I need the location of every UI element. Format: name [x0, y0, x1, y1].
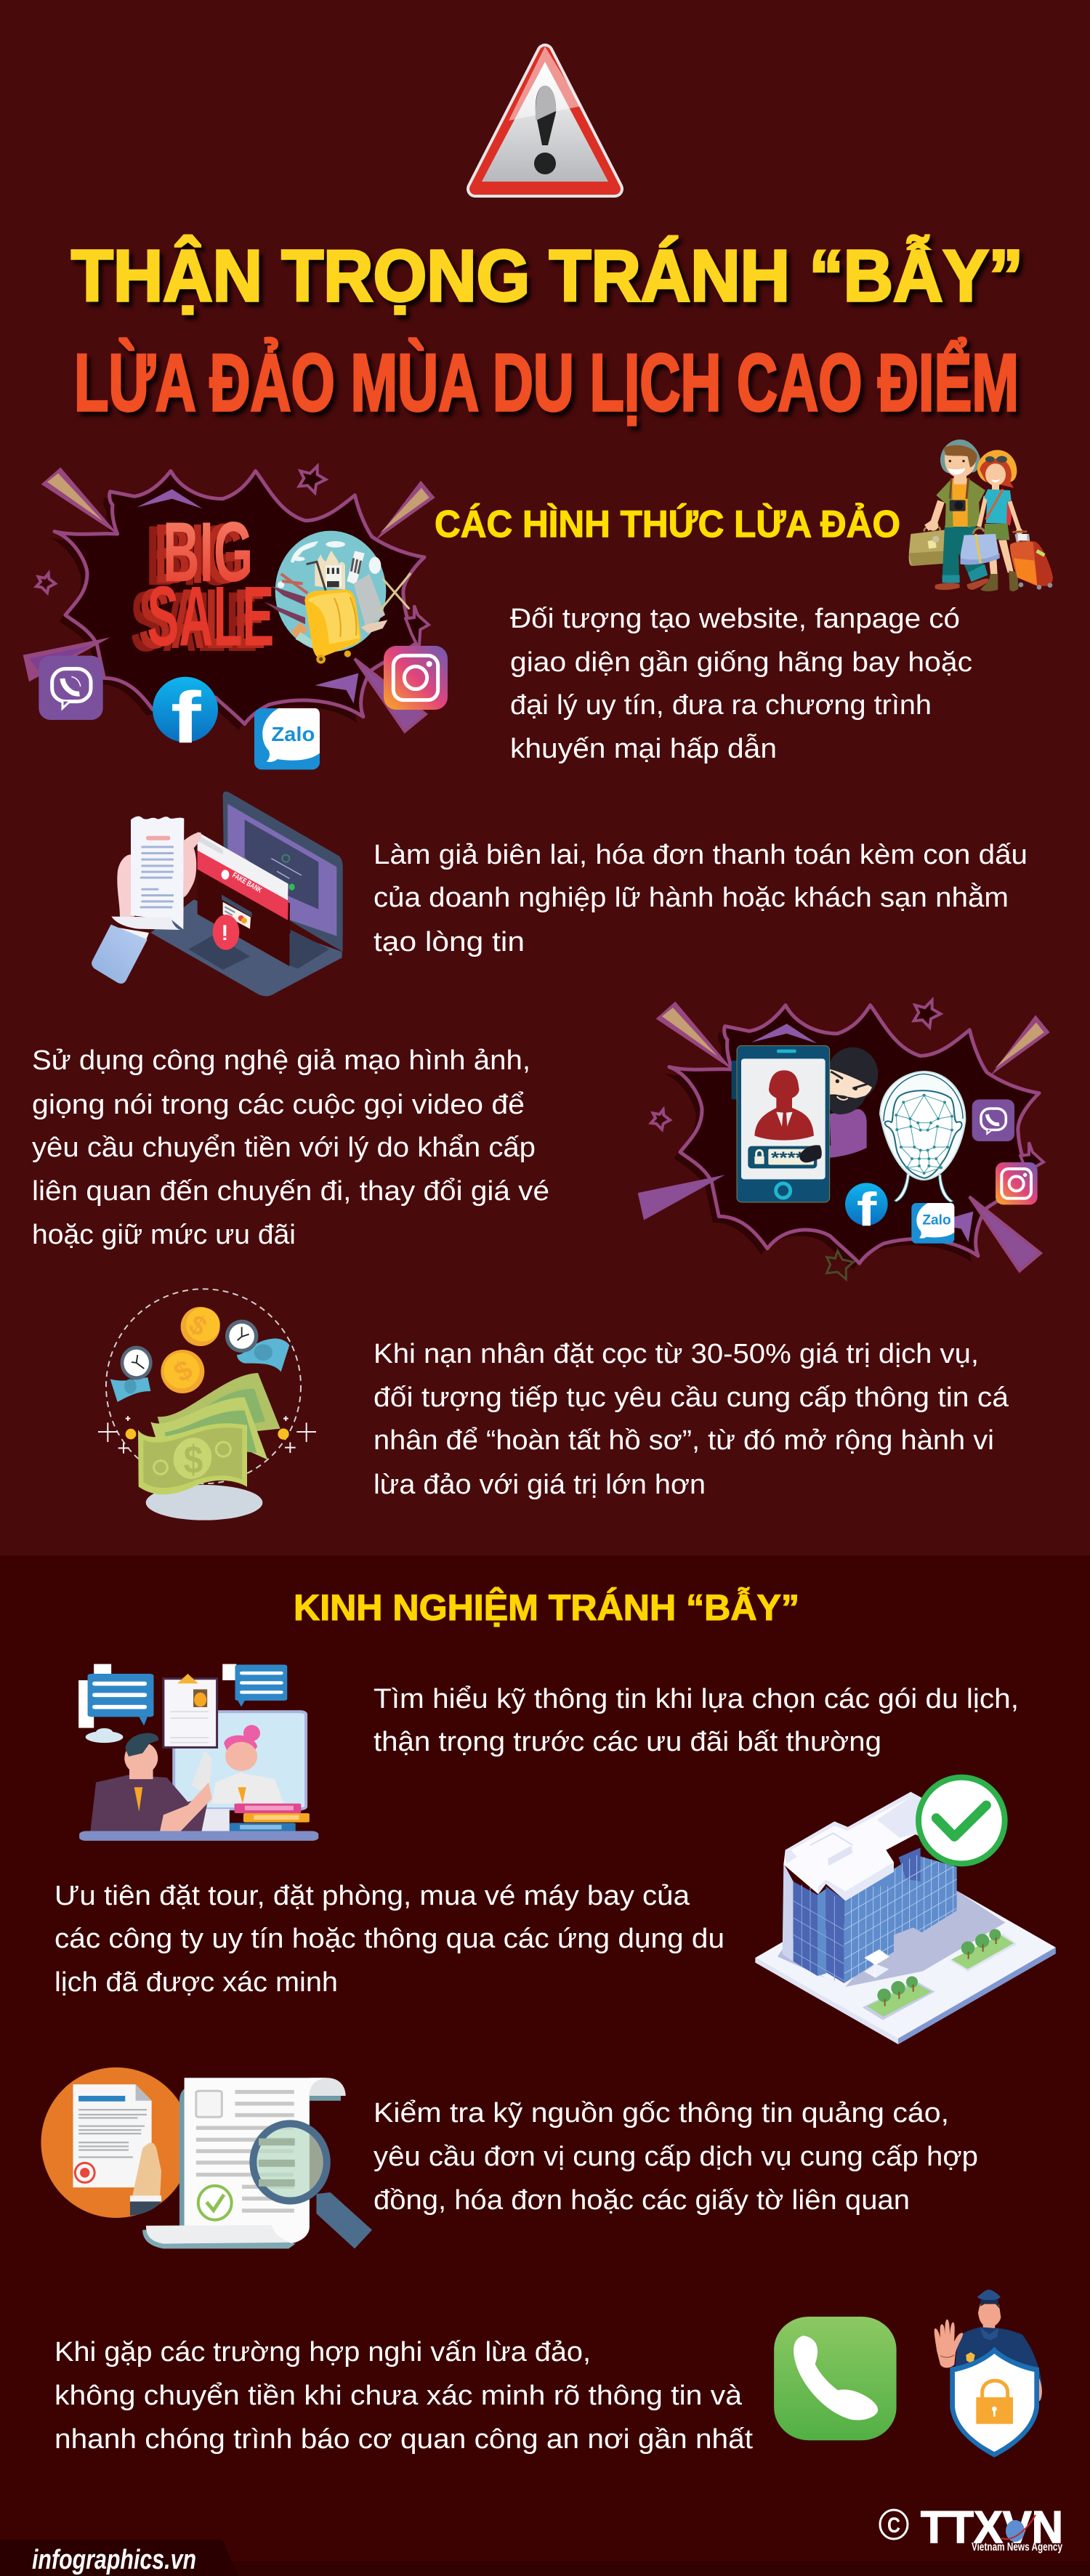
illustration: thief [820, 1048, 878, 1159]
text: big sale: SALE [139, 571, 266, 666]
icon: facebook small [845, 1183, 888, 1236]
illustration: deepfake content [732, 1045, 1038, 1244]
text block: deposit: Khi nạn nhân đặt cọc từ 30-50% giá trị dịch vụ, [374, 1339, 979, 1369]
icon: warning triangle [475, 46, 615, 189]
illustration: fake receipt and laptop [92, 792, 343, 996]
illustration: coins, clocks and money [98, 1289, 316, 1520]
text: big sale: SALE [130, 574, 257, 669]
illustration: tourists with luggage [909, 440, 1053, 591]
text: big sale: BIG [154, 506, 244, 602]
text block: report [54, 2337, 753, 2455]
heading: forms of scam: CÁC HÌNH THỨC LỪA ĐẢO [435, 503, 900, 546]
icon: magnifier [253, 2123, 372, 2248]
text: fake bank: FAKE BANK [230, 871, 264, 895]
text block: fake receipts: của doanh nghiệp lữ hành hoặc khách sạn nhằm [374, 882, 1009, 913]
trees [877, 1929, 1001, 2002]
icon: zalo small: Zalo [922, 1213, 951, 1228]
text block: deepfake: yêu cầu chuyển tiền với lý do khẩn cấp [32, 1133, 536, 1163]
text block: fake website [510, 604, 972, 764]
text block: report: Khi gặp các trường hợp nghi vấn lừa đảo, [54, 2337, 591, 2368]
text block: report: nhanh chóng trình báo cơ quan công an nơi gần nhất [54, 2424, 753, 2455]
text block: trusted companies [54, 1881, 724, 1998]
text block: fake receipts: tạo lòng tin [374, 927, 525, 957]
footer tab: infographics.vn: infographics.vn [32, 2545, 196, 2575]
text: big sale: SALE [147, 568, 274, 663]
text block: fake receipts: Làm giả biên lai, hóa đơn thanh toán kèm con dấu [374, 840, 1028, 870]
text block: research: thận trọng trước các ưu đãi bất thường [374, 1727, 881, 1757]
icon: instagram small [996, 1162, 1038, 1204]
text block: fake website: khuyến mại hấp dẫn [510, 733, 777, 764]
text: big sale: BIG [146, 508, 236, 603]
title: THẬN TRỌNG TRÁNH “BẪY” [71, 235, 1023, 317]
logo: TTXVN: C [887, 2514, 900, 2537]
icon: instagram [384, 646, 448, 710]
text block: deepfake: giọng nói trong các cuộc gọi video để [32, 1090, 525, 1120]
illustration: globe and suitcase [264, 531, 411, 664]
icon: zalo: Zalo [271, 723, 315, 745]
icon: zalo [254, 708, 320, 769]
text block: check sources: Kiểm tra kỹ nguồn gốc thông tin quảng cáo, [374, 2098, 949, 2129]
icon: facebook: f [171, 677, 202, 758]
text block: trusted companies: Ưu tiên đặt tour, đặt phòng, mua vé máy bay của [54, 1881, 690, 1911]
icon: viber [39, 656, 103, 720]
illustration: phone with silhouette [732, 1045, 830, 1202]
illustration: video consultation [78, 1664, 318, 1841]
text: big sale: BIG [163, 504, 253, 599]
logo: TTXVN: TTXVN [921, 2503, 1063, 2553]
icon: facebook [153, 677, 218, 758]
text block: fake receipts [374, 840, 1028, 957]
illustration: phone with silhouette: **** [771, 1149, 804, 1167]
illustration: documents and magnifier [41, 2067, 372, 2248]
text block: report: không chuyển tiền khi chưa xác minh rõ thông tin và [54, 2381, 743, 2411]
text block: trusted companies: các công ty uy tín hoặc thông qua các ứng dụng du [54, 1924, 724, 1954]
icon: green check [919, 1778, 1005, 1863]
text block: check sources: đồng, hóa đơn hoặc các giấy tờ liên quan [374, 2185, 910, 2216]
text block: deposit [374, 1339, 1009, 1500]
illustration: coins, clocks and money: $ [169, 1354, 198, 1389]
footer strip [0, 2561, 1090, 2576]
text block: deepfake [32, 1045, 549, 1250]
text block: fake website: đại lý uy tín, đưa ra chương trình [510, 690, 932, 721]
icon: zalo small [911, 1203, 954, 1244]
text block: trusted companies: lịch đã được xác minh [54, 1967, 338, 1998]
illustration: face scan [880, 1072, 965, 1202]
text block: fake website: Đối tượng tạo website, fanpage có [510, 604, 960, 634]
text block: deepfake: hoặc giữ mức ưu đãi [32, 1220, 296, 1250]
text block: research [374, 1684, 1019, 1757]
icon: phone [774, 2317, 897, 2440]
text block: check sources: yêu cầu đơn vị cung cấp dịch vụ cung cấp hợp [374, 2142, 978, 2172]
icon: viber small [972, 1099, 1014, 1141]
illustration: coins, clocks and money: $ [184, 1438, 203, 1481]
illustration: deepfake burst outline [638, 1000, 1050, 1279]
text block: deepfake: Sử dụng công nghệ giả mạo hình ảnh, [32, 1045, 530, 1076]
text block: deposit: đối tượng tiếp tục yêu cầu cung cấp thông tin cá [374, 1382, 1009, 1413]
heading: experience: KINH NGHIỆM TRÁNH “BẪY” [294, 1587, 799, 1628]
text block: research: Tìm hiểu kỹ thông tin khi lựa chọn các gói du lịch, [374, 1684, 1019, 1714]
icon: facebook small: f [857, 1183, 877, 1236]
text block: fake website: giao diện gần giống hãng bay hoặc [510, 647, 972, 678]
background: upper section [0, 0, 1090, 1555]
title [71, 235, 1023, 428]
background: lower section [0, 1555, 1090, 2576]
text block: deepfake: liên quan đến chuyến đi, thay đổi giá vé [32, 1176, 549, 1207]
icon: police officer with shield [934, 2290, 1042, 2458]
illustration: coins, clocks and money: $ [184, 1309, 212, 1342]
text block: deposit: nhân để “hoàn tất hồ sơ”, từ đó mở rộng hành vi [374, 1425, 994, 1456]
illustration: big sale burst with social icons [23, 466, 448, 769]
text block: check sources [374, 2098, 978, 2216]
text block: deposit: lừa đảo với giá trị lớn hơn [374, 1470, 706, 1500]
illustration: verified building [755, 1778, 1056, 2044]
text: big sale [130, 504, 274, 669]
